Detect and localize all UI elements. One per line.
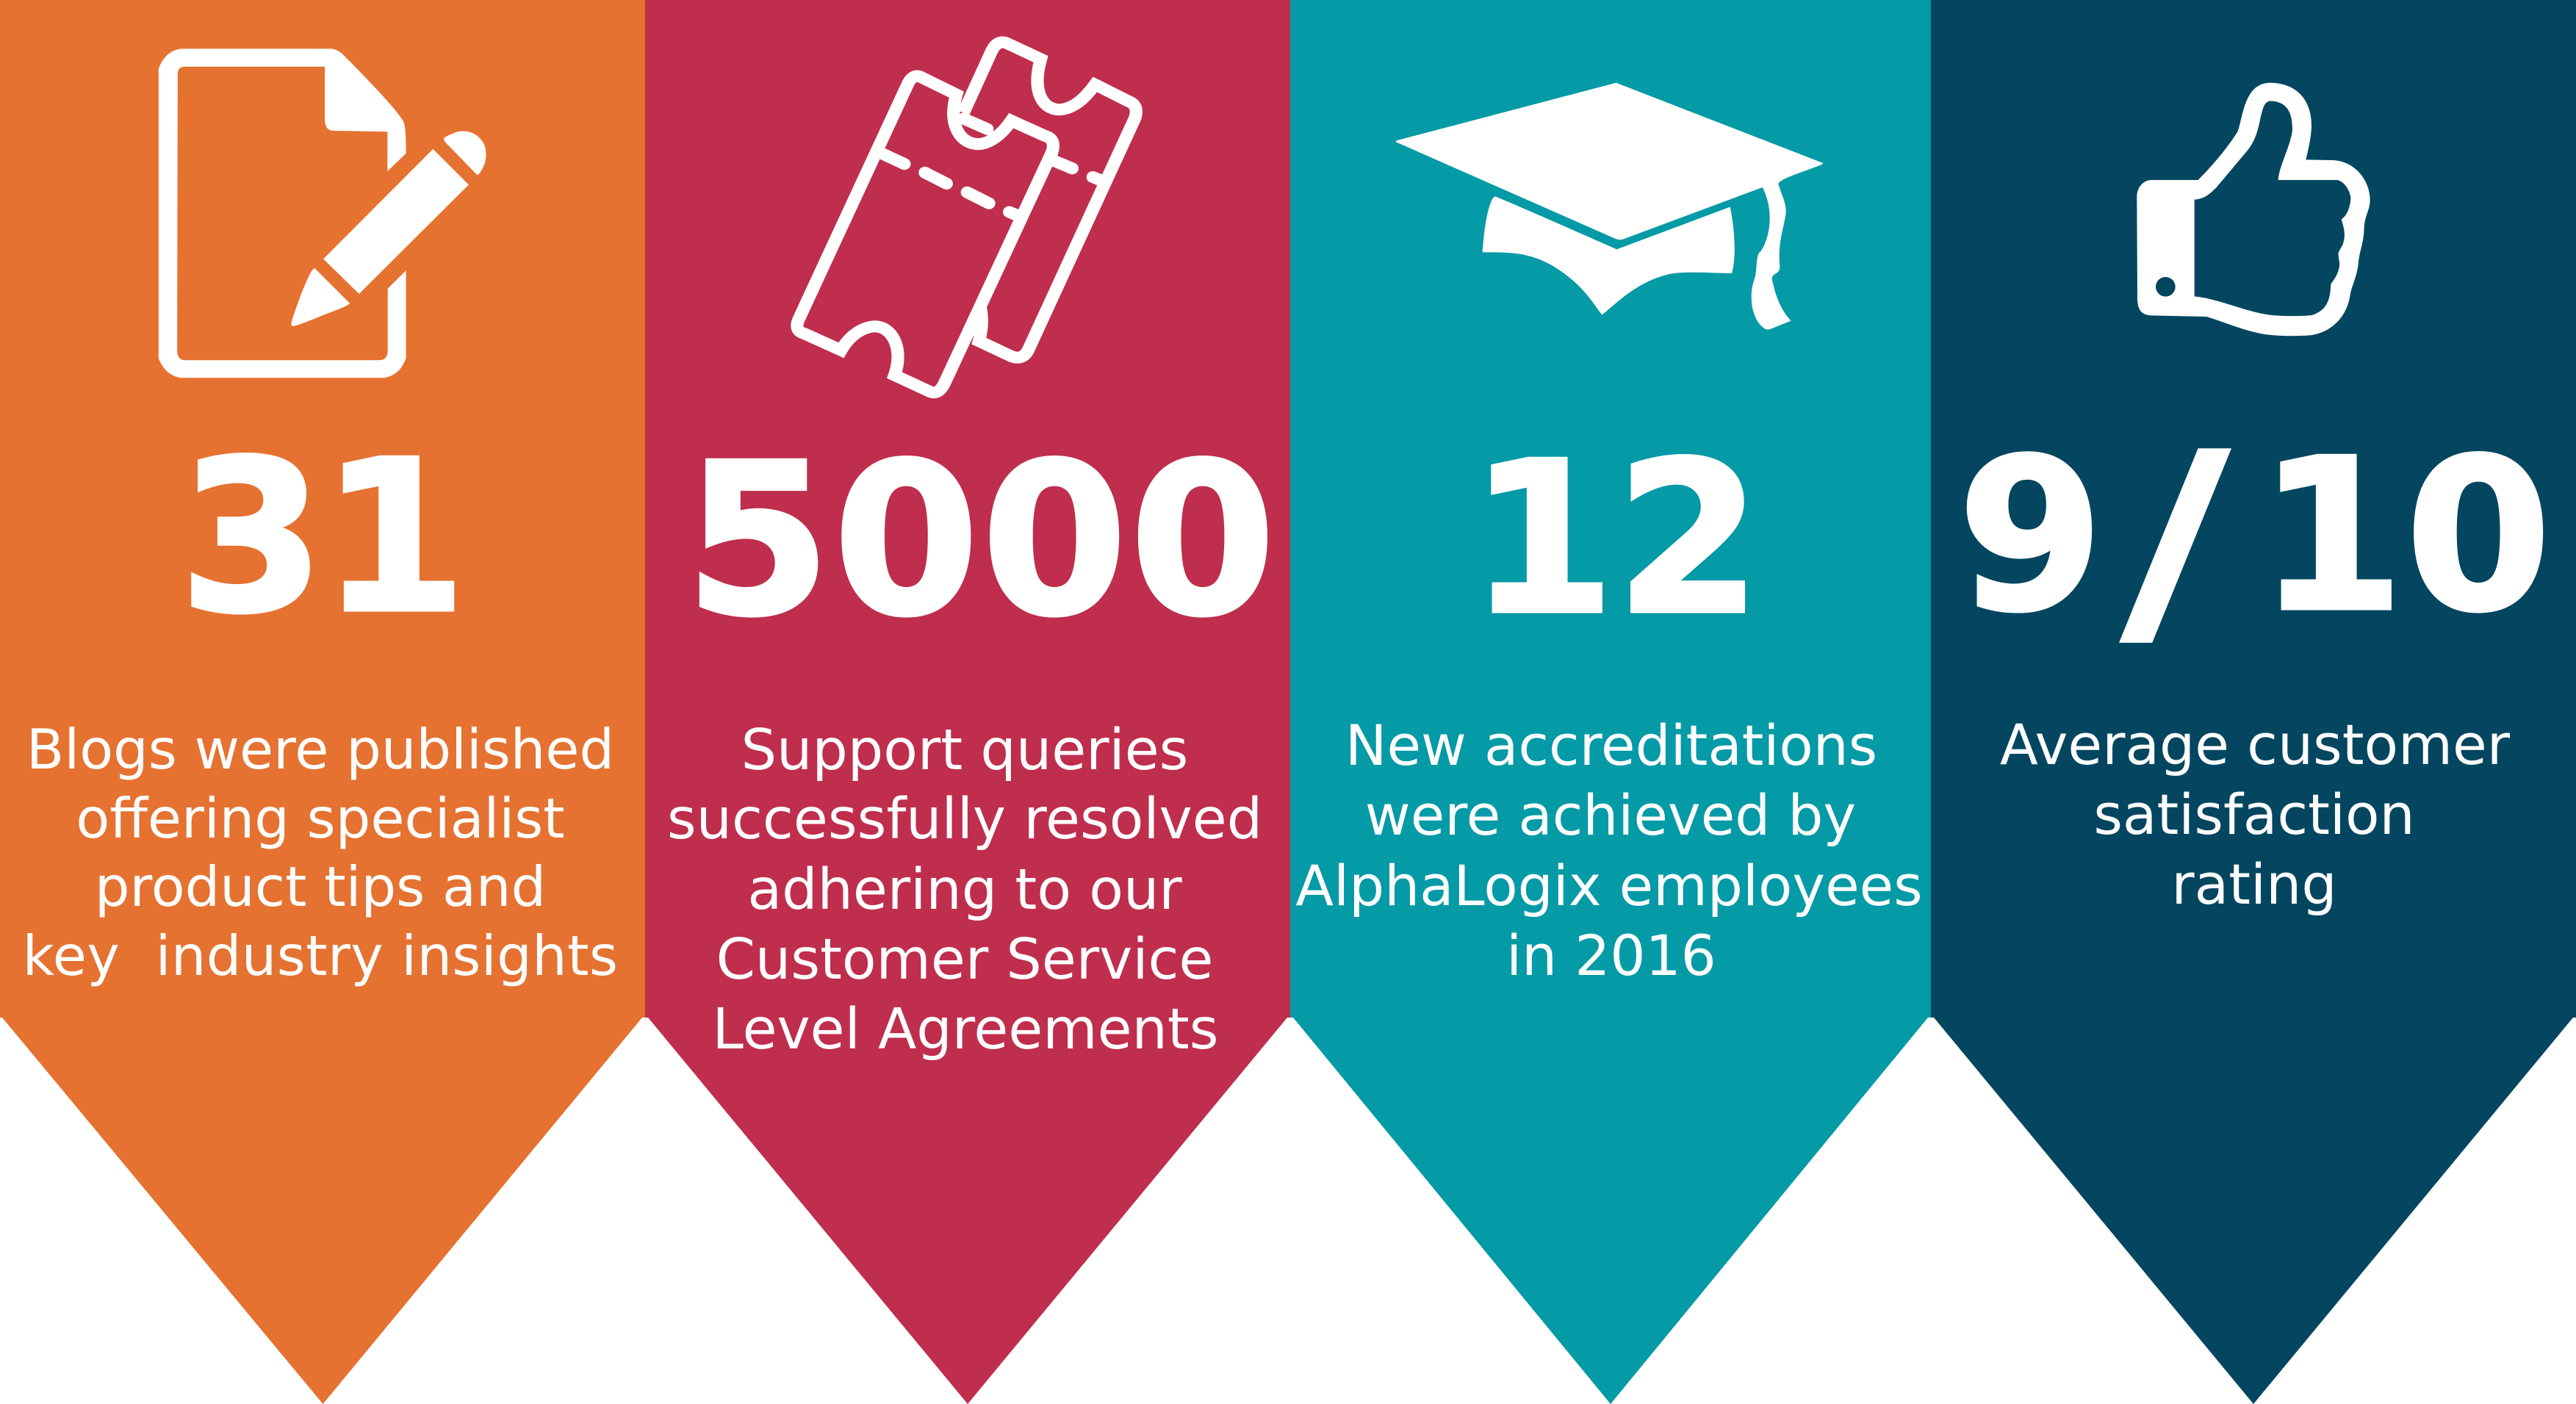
description: satisfaction bbox=[2000, 712, 2511, 917]
number: 9/10: / bbox=[2119, 402, 2234, 677]
description: blogs: key industry insights bbox=[23, 924, 618, 988]
icon: tickets bbox=[797, 43, 1136, 392]
description: blogs: Blogs were published bbox=[26, 717, 614, 782]
teal banner shape bbox=[1290, 0, 1931, 1404]
number: 5000: 5000 bbox=[685, 419, 1278, 663]
icon: thumbs up bbox=[2137, 83, 2370, 336]
description: accreditations: were achieved by bbox=[1365, 783, 1856, 848]
description: support: Support queries bbox=[741, 717, 1188, 782]
description: blogs: product tips and bbox=[95, 854, 546, 919]
number: 31: 31 bbox=[179, 416, 463, 660]
description: satisfaction: satisfaction bbox=[2093, 782, 2415, 847]
description: accreditations bbox=[1295, 713, 1923, 988]
description: support: adhering to our bbox=[747, 857, 1182, 922]
description: support bbox=[667, 717, 1262, 1062]
orange banner shape bbox=[0, 0, 645, 1404]
number: 12: 12 bbox=[1469, 417, 1762, 661]
icon: document and pencil bbox=[159, 48, 486, 378]
description: blogs: offering specialist bbox=[76, 786, 565, 851]
description: blogs bbox=[23, 717, 618, 988]
icon: graduation cap bbox=[1396, 83, 1823, 330]
description: support: Customer Service bbox=[716, 926, 1213, 992]
navy banner shape bbox=[1931, 0, 2576, 1404]
description: support: Level Agreements bbox=[712, 996, 1219, 1062]
description: satisfaction: rating bbox=[2171, 852, 2337, 917]
panel: support queries bbox=[645, 0, 1290, 1404]
description: accreditations: in 2016 bbox=[1506, 924, 1716, 988]
description: accreditations: AlphaLogix employees bbox=[1295, 854, 1923, 918]
panel: satisfaction bbox=[1931, 0, 2576, 1404]
crimson banner shape bbox=[645, 0, 1290, 1404]
panel: blogs published bbox=[0, 0, 645, 1404]
panel: accreditations bbox=[1290, 0, 1931, 1404]
description: accreditations: New accreditations bbox=[1345, 713, 1877, 778]
number: 9/10: 9 bbox=[1958, 414, 2107, 658]
number: 9/10: 10 bbox=[2259, 414, 2552, 658]
description: satisfaction: Average customer bbox=[2000, 712, 2511, 777]
description: support: successfully resolved bbox=[667, 786, 1262, 852]
number: 9/10 bbox=[1958, 402, 2552, 677]
